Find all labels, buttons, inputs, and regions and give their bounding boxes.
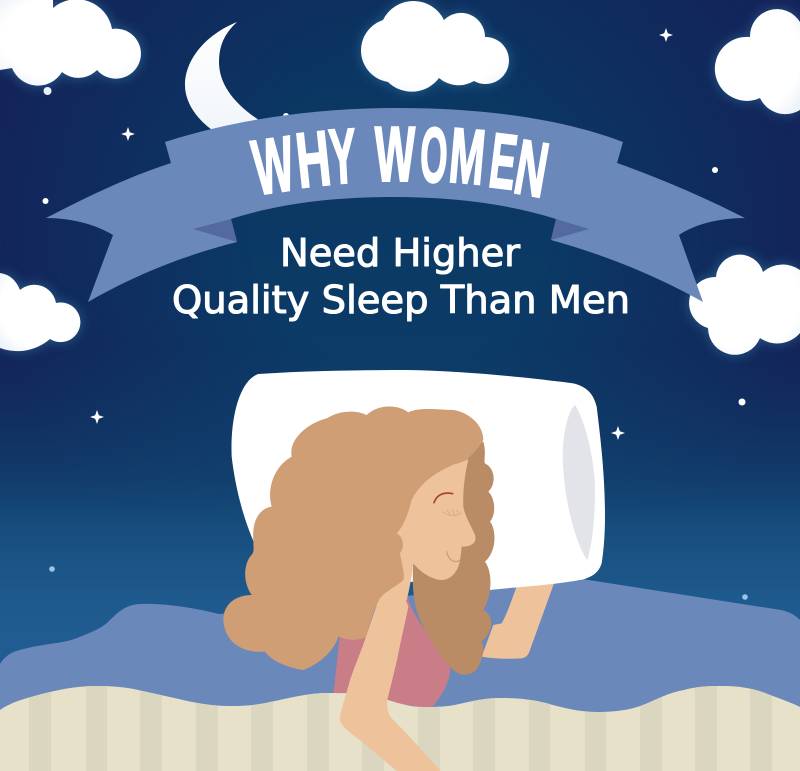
title: WHY WOMEN: W bbox=[247, 120, 300, 212]
title: WHY WOMEN: N bbox=[509, 124, 554, 215]
title: WHY WOMEN: H bbox=[292, 114, 335, 205]
title: WHY WOMEN: E bbox=[485, 117, 521, 207]
eyebrow bbox=[434, 493, 453, 503]
ribbon fold right bbox=[551, 219, 589, 240]
striped sheet bbox=[0, 680, 800, 771]
cloud: middle left bbox=[0, 273, 80, 351]
ribbon banner bbox=[46, 108, 745, 302]
subtitle bbox=[172, 231, 630, 322]
cloud: top right bbox=[715, 9, 800, 114]
woman's arm over sheet bbox=[340, 590, 441, 771]
dark hair bbox=[413, 442, 495, 674]
title: WHY WOMEN bbox=[247, 111, 554, 215]
ribbon fold left bbox=[193, 219, 237, 242]
pink top bbox=[333, 597, 451, 708]
eyelashes bbox=[443, 509, 462, 516]
moon bbox=[185, 22, 262, 132]
ribbon body bbox=[46, 108, 745, 302]
stars and dots bbox=[42, 28, 748, 600]
cloud: top left bbox=[0, 0, 141, 86]
cloud: middle right bbox=[689, 255, 800, 355]
title: WHY WOMEN: Y bbox=[327, 113, 358, 201]
subtitle: Quality Sleep Than Men bbox=[172, 278, 630, 322]
face and neck bbox=[373, 459, 476, 607]
pillow bbox=[231, 370, 605, 590]
raised hand bbox=[482, 583, 554, 659]
title: WHY WOMEN: M bbox=[446, 112, 489, 202]
sleeping woman bbox=[223, 370, 605, 708]
title: WHY WOMEN: O bbox=[419, 111, 449, 199]
pillow end bbox=[563, 405, 595, 560]
cloud: top centre bbox=[361, 1, 509, 92]
subtitle: Need Higher bbox=[280, 231, 520, 275]
blanket bbox=[0, 579, 800, 771]
title: WHY WOMEN: W bbox=[375, 112, 416, 198]
light hair bbox=[223, 406, 483, 670]
smile bbox=[447, 552, 460, 562]
